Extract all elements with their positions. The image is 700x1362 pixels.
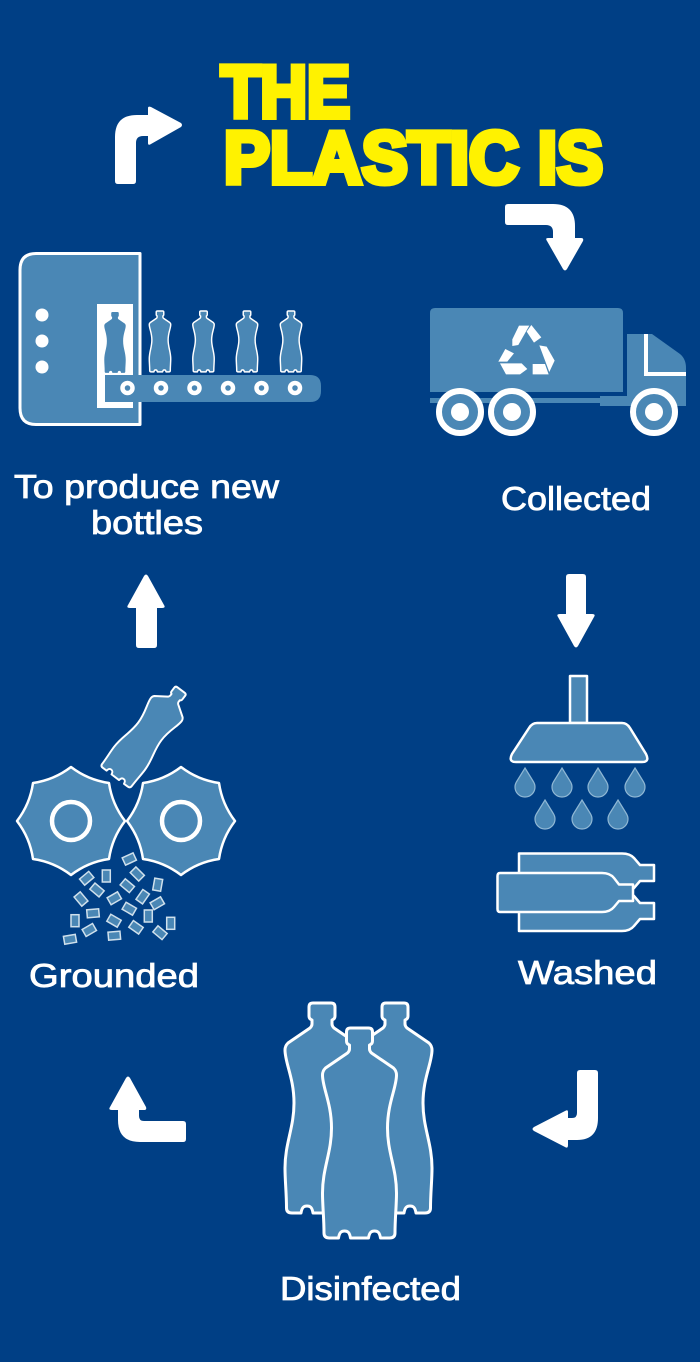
arrow: up to new bottles <box>127 574 165 648</box>
label: to produce new bottles: To produce new <box>14 468 279 505</box>
label: disinfected: Disinfected <box>280 1270 461 1307</box>
label: grounded: Grounded <box>29 957 199 994</box>
label: collected: Collected <box>501 480 651 517</box>
icon: bottle production machine <box>20 254 321 424</box>
label: to produce new bottles: bottles <box>91 504 203 541</box>
title <box>221 52 603 199</box>
label: washed: Washed <box>518 954 657 991</box>
icon: washed bottles lying down <box>498 854 654 931</box>
arrow: top-right turning down <box>505 204 583 270</box>
arrow: down to washing <box>557 574 595 648</box>
icon: shower head with water drops <box>511 676 647 829</box>
arrow: bottom-right turning left <box>532 1070 598 1148</box>
arrow: bottom-left turning up <box>109 1076 186 1142</box>
title: PLASTIC IS <box>224 118 603 199</box>
icon: grinder gears shredding a bottle <box>17 678 235 944</box>
icon: recycling truck <box>430 308 686 433</box>
title: THE <box>221 52 350 133</box>
label: to produce new bottles <box>14 468 279 541</box>
icon: three disinfected bottles <box>285 1003 432 1238</box>
arrow: top-left turning right <box>115 107 182 184</box>
